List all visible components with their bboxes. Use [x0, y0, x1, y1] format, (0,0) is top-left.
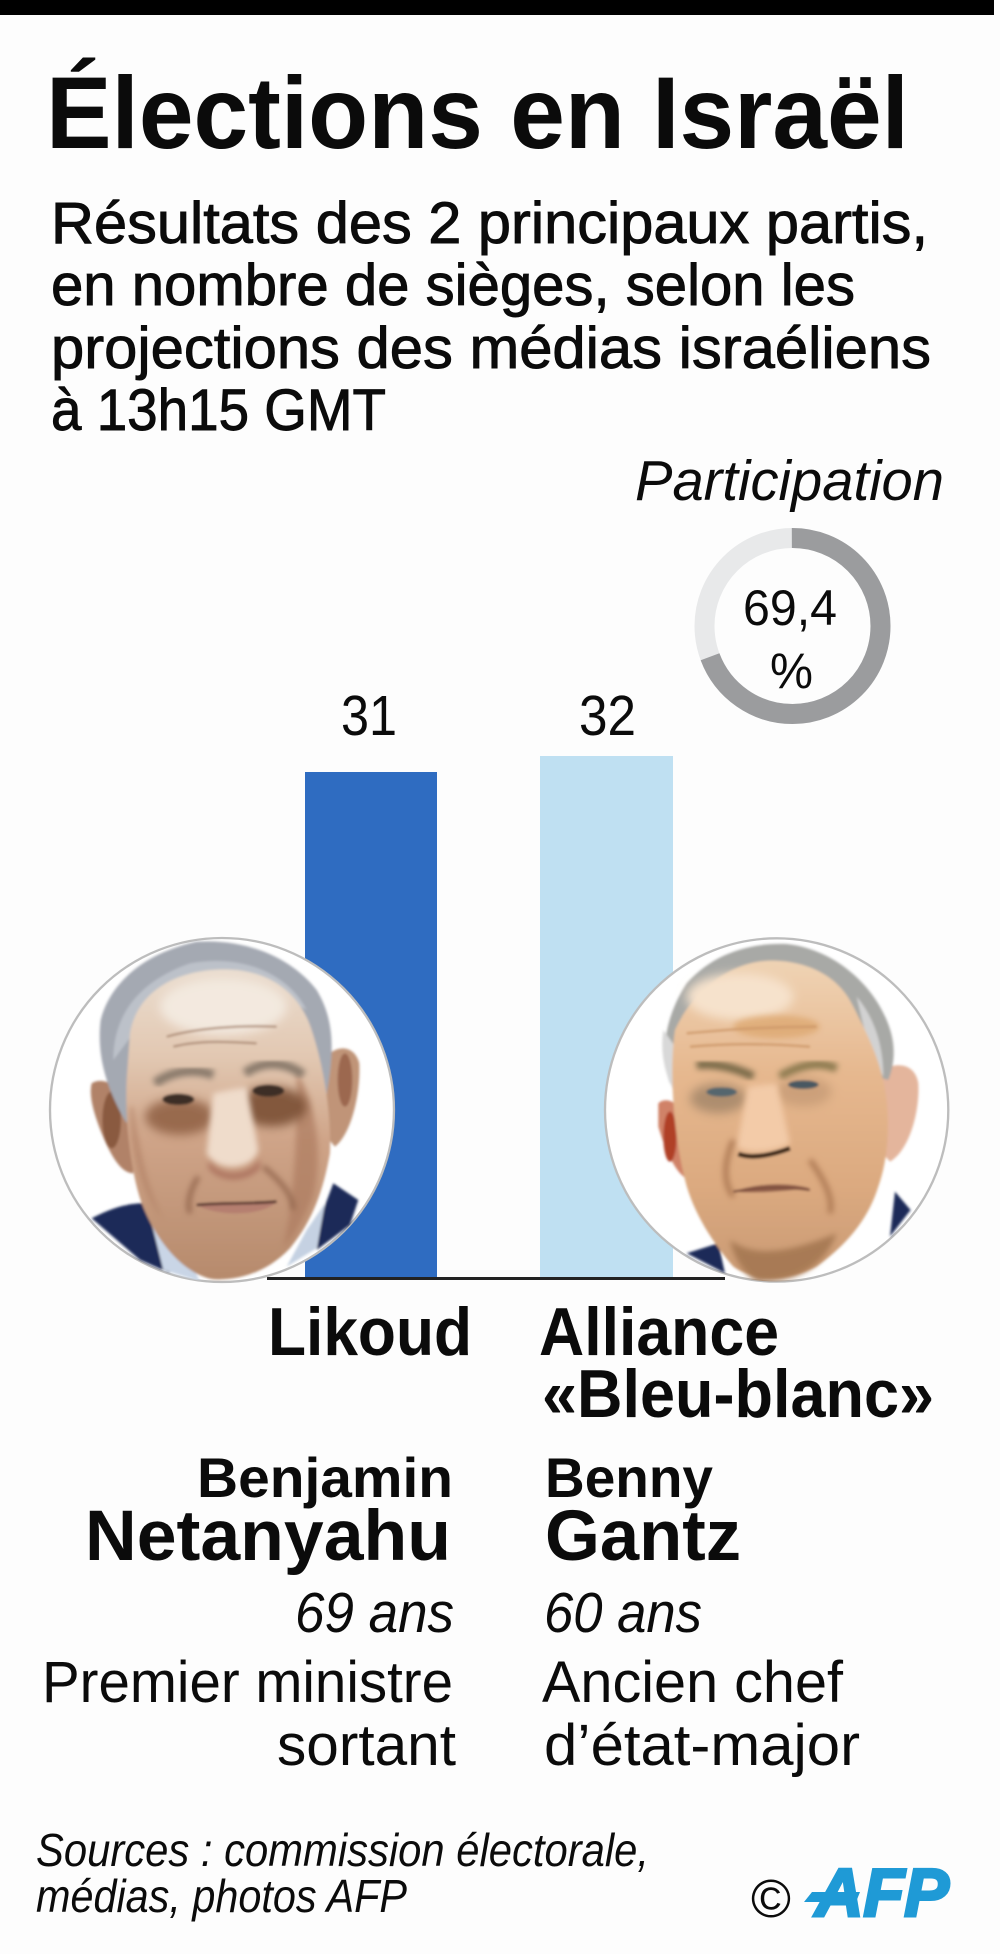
portrait: Benjamin Netanyahu: [50, 938, 394, 1282]
subtitle: [51, 191, 931, 443]
hair: [100, 941, 332, 1123]
value: Alliance 32: 32: [579, 684, 636, 748]
role: [42, 1650, 456, 1778]
nose: [737, 1083, 790, 1152]
age: 60 ans: [544, 1581, 702, 1645]
hair: [665, 944, 894, 1083]
chin shadow: [730, 1233, 837, 1282]
mouth: [200, 1202, 274, 1214]
forehead tan: [733, 1015, 820, 1038]
name: Gantz: [545, 1497, 741, 1576]
face: [672, 961, 888, 1279]
sources: Sources : commission électorale,: [36, 1824, 649, 1876]
cheek folds: [189, 1167, 293, 1213]
portrait: Benny Gantz: [605, 938, 948, 1282]
participation chart: [635, 449, 944, 714]
jacket and collar: [92, 1203, 170, 1273]
sources: médias, photos AFP: [36, 1870, 407, 1922]
donut value text: [743, 580, 837, 699]
nose: [207, 1087, 258, 1167]
role: sortant: [277, 1713, 456, 1778]
donut background track: [704, 538, 880, 714]
party label: Alliance Bleu-blanc: Alliance: [539, 1294, 779, 1370]
name: Netanyahu: [85, 1497, 451, 1576]
sources: [36, 1824, 649, 1922]
role: d’état-major: [544, 1713, 860, 1778]
ears: [658, 1100, 690, 1180]
subtitle: projections des médias israéliens: [51, 316, 931, 381]
subtitle: à 13h15 GMT: [51, 378, 386, 443]
copyright and AFP logo: [751, 1855, 950, 1931]
name: Benjamin: [197, 1446, 453, 1509]
party label: Likoud: Likoud: [268, 1294, 472, 1370]
top black band: [0, 0, 994, 15]
eyes: [706, 1087, 737, 1097]
face: [126, 969, 330, 1279]
party label: Alliance Bleu-blanc: [539, 1294, 934, 1432]
eye sockets: [690, 1083, 747, 1113]
copyright symbol: ©: [751, 1869, 791, 1929]
candidate block: Gantz: [542, 1446, 860, 1778]
donut value text: 69,4: [743, 580, 837, 636]
donut value text: %: [770, 643, 813, 699]
ears: [91, 1081, 133, 1173]
face side shading: [286, 1076, 320, 1240]
subtitle: Résultats des 2 principaux partis,: [51, 191, 928, 256]
name: [545, 1446, 741, 1576]
subtitle: en nombre de sièges, selon les: [51, 253, 855, 318]
eyes: [162, 1094, 194, 1105]
eye bags: [145, 1098, 215, 1135]
bar: Likoud: [305, 772, 437, 1277]
name: Benny: [545, 1446, 713, 1509]
mouth: [733, 1184, 810, 1192]
party label: Alliance Bleu-blanc: «Bleu-blanc»: [542, 1356, 934, 1432]
eyebrows: [155, 1071, 213, 1083]
value: Likoud 31: 31: [341, 684, 397, 748]
eyebrows: [697, 1065, 753, 1077]
role: Premier ministre: [42, 1650, 453, 1715]
participation label: Participation: [635, 449, 944, 513]
forehead highlight: [160, 978, 287, 1035]
icon: AFP logo: AFP: [813, 1855, 950, 1931]
name: [85, 1446, 453, 1576]
candidate block: Netanyahu: [42, 1446, 456, 1778]
title: Élections en Israël: [46, 56, 909, 170]
jacket: [687, 1243, 725, 1273]
forehead lines: [687, 1027, 817, 1047]
role: [542, 1650, 860, 1778]
axis baseline: [267, 1277, 725, 1280]
forehead highlight: [687, 973, 793, 1020]
bar chart: [267, 684, 725, 1280]
forehead lines: [167, 1026, 277, 1047]
cheek folds: [726, 1140, 831, 1213]
bar: Alliance Bleu-blanc: [540, 756, 673, 1277]
age: 69 ans: [295, 1581, 454, 1645]
donut value arc 69.4 percent: [704, 538, 880, 714]
role: Ancien chef: [542, 1650, 844, 1715]
